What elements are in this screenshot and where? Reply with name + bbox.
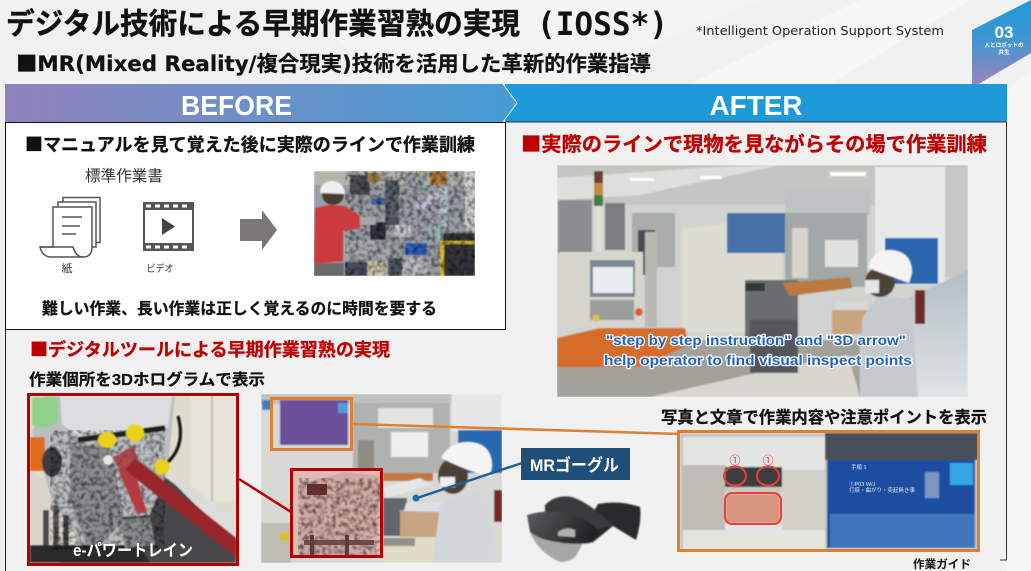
label: MR goggles [521,448,630,480]
label: work guide: 作業ガイド [913,557,971,571]
photo: e-powertrain with hologram [28,394,238,565]
label: e-powertrain: e-パワートレイン [73,541,193,560]
panel: before [6,122,506,330]
photo: work guide view: ① [730,454,740,467]
label: standard work document: 標準作業書 [85,167,163,185]
photo: operator with hologram overlays [261,394,502,563]
label: paper: 紙 [62,261,72,275]
photo: work guide view: 手順 1 [851,463,867,471]
connector: red line to e-powertrain [239,479,291,512]
panel: after frame [506,122,1006,560]
title: デジタル技術による早期作業習熟の実現 [6,7,520,41]
before caption: 難しい作業、長い作業は正しく覚えるのに時間を要する [42,299,437,318]
label: MR goggles: MRゴーグル [530,455,619,475]
photo: work guide view [678,432,978,550]
digital tool heading: ■デジタルツールによる早期作業習熟の実現 [30,336,390,362]
left frame line [4,330,6,571]
header band: before: BEFORE [181,90,292,121]
section tab: 03: 共生 [998,48,1010,56]
photo caption: step by step: "step by step instruction" and "3D arrow" [606,333,906,348]
header band: after [505,84,1007,122]
photo: after, operator with MR goggles [557,165,968,397]
title: (IOSS*) [537,5,668,43]
photo caption: step by step: help operator to find visual inspect points [604,353,912,368]
hologram subheading: 作業個所を3Dホログラムで表示 [29,370,265,389]
guide heading: 写真と文章で作業内容や注意ポイントを表示 [661,408,987,427]
arrow [240,210,277,250]
label: video: ビデオ [146,262,174,275]
photo caption: step by step [604,333,912,368]
header band: before [5,84,517,122]
footnote: IOSS definition: *Intelligent Operation Support System [696,23,944,38]
icon: video film strip [143,202,194,251]
connector: orange line to work guide [353,424,680,434]
subtitle: ■MR(Mixed Reality/複合現実)技術を活用した革新的作業指導 [16,48,651,78]
section tab: 03: 03 [995,23,1013,42]
photo: work guide view: ① [762,454,774,467]
section tab: 03 [972,0,1031,88]
header band: after: AFTER [710,90,802,121]
icon: MR goggles headset [527,496,640,562]
connector: blue line to MR goggles [412,463,522,502]
photo: work guide view: 打痕・曲がり・突起無き事 [849,486,916,494]
section tab: 03: 人とロボットの [984,41,1024,49]
title [6,5,668,43]
before heading: ■マニュアルを見て覚えた後に実際のラインで作業訓練 [25,131,475,157]
photo: worker on assembly line [314,171,475,276]
icon: paper document stack [40,198,100,257]
photo: work guide view: ①P03 W/J [849,480,876,488]
after heading: ■実際のラインで現物を見ながらその場で作業訓練 [521,128,987,157]
